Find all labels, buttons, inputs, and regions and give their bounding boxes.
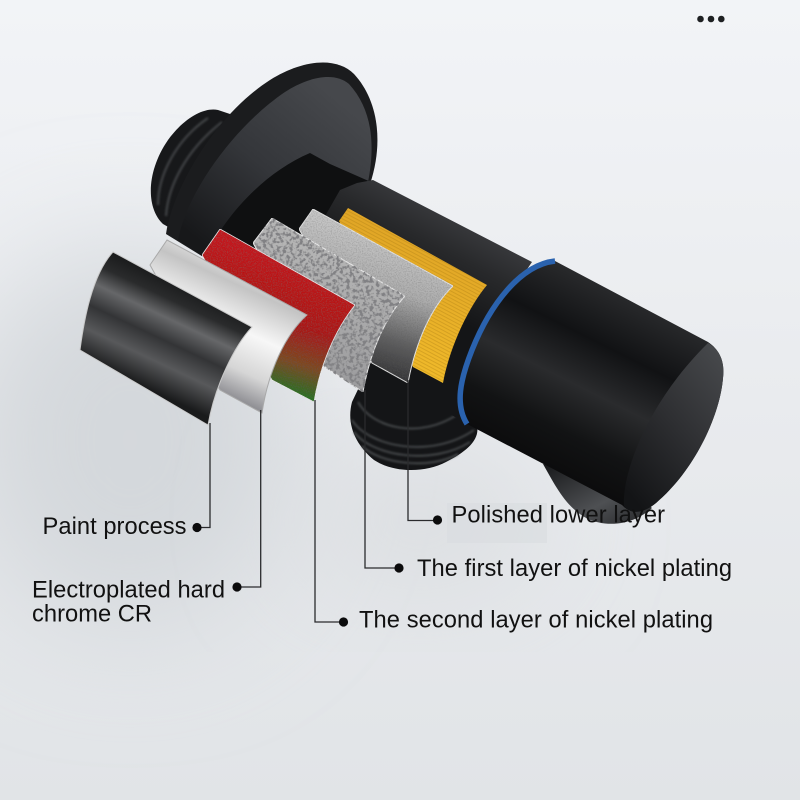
neck [205,153,380,258]
callout: polished lower layer: Polished lower layer [452,502,665,528]
layer: second nickel [253,218,405,392]
callout: electroplated hard chrome [32,410,261,628]
layer: black paint [80,252,252,425]
menu dots icon [697,16,725,22]
layer: polished gold [339,208,487,383]
wall flange [166,63,377,258]
handle cap spout [543,464,652,524]
patch behind polished label [447,503,547,543]
blue seal ring [460,261,555,424]
callout: second nickel layer [315,400,713,634]
cutaway layers [80,208,487,425]
callout: first nickel layer: The first layer of nickel plating [417,556,732,582]
callout: first nickel layer [365,390,732,582]
layer: first nickel [299,209,453,383]
callout: second nickel layer: The second layer of nickel plating [359,608,713,634]
valve product illustration [151,63,723,524]
callout: electroplated hard chrome: Electroplated hard [32,578,225,604]
rear threaded connector [151,110,236,228]
handle cap [460,261,723,512]
callout: polished lower layer [408,380,665,528]
callout: paint process: Paint process [42,514,186,540]
valve body [300,180,532,424]
lower threaded outlet [350,360,477,470]
callout: electroplated hard chrome: chrome CR [32,602,152,628]
callout: paint process [42,423,210,540]
layer: hard chrome [150,240,307,413]
layer: red and green base [202,229,355,402]
